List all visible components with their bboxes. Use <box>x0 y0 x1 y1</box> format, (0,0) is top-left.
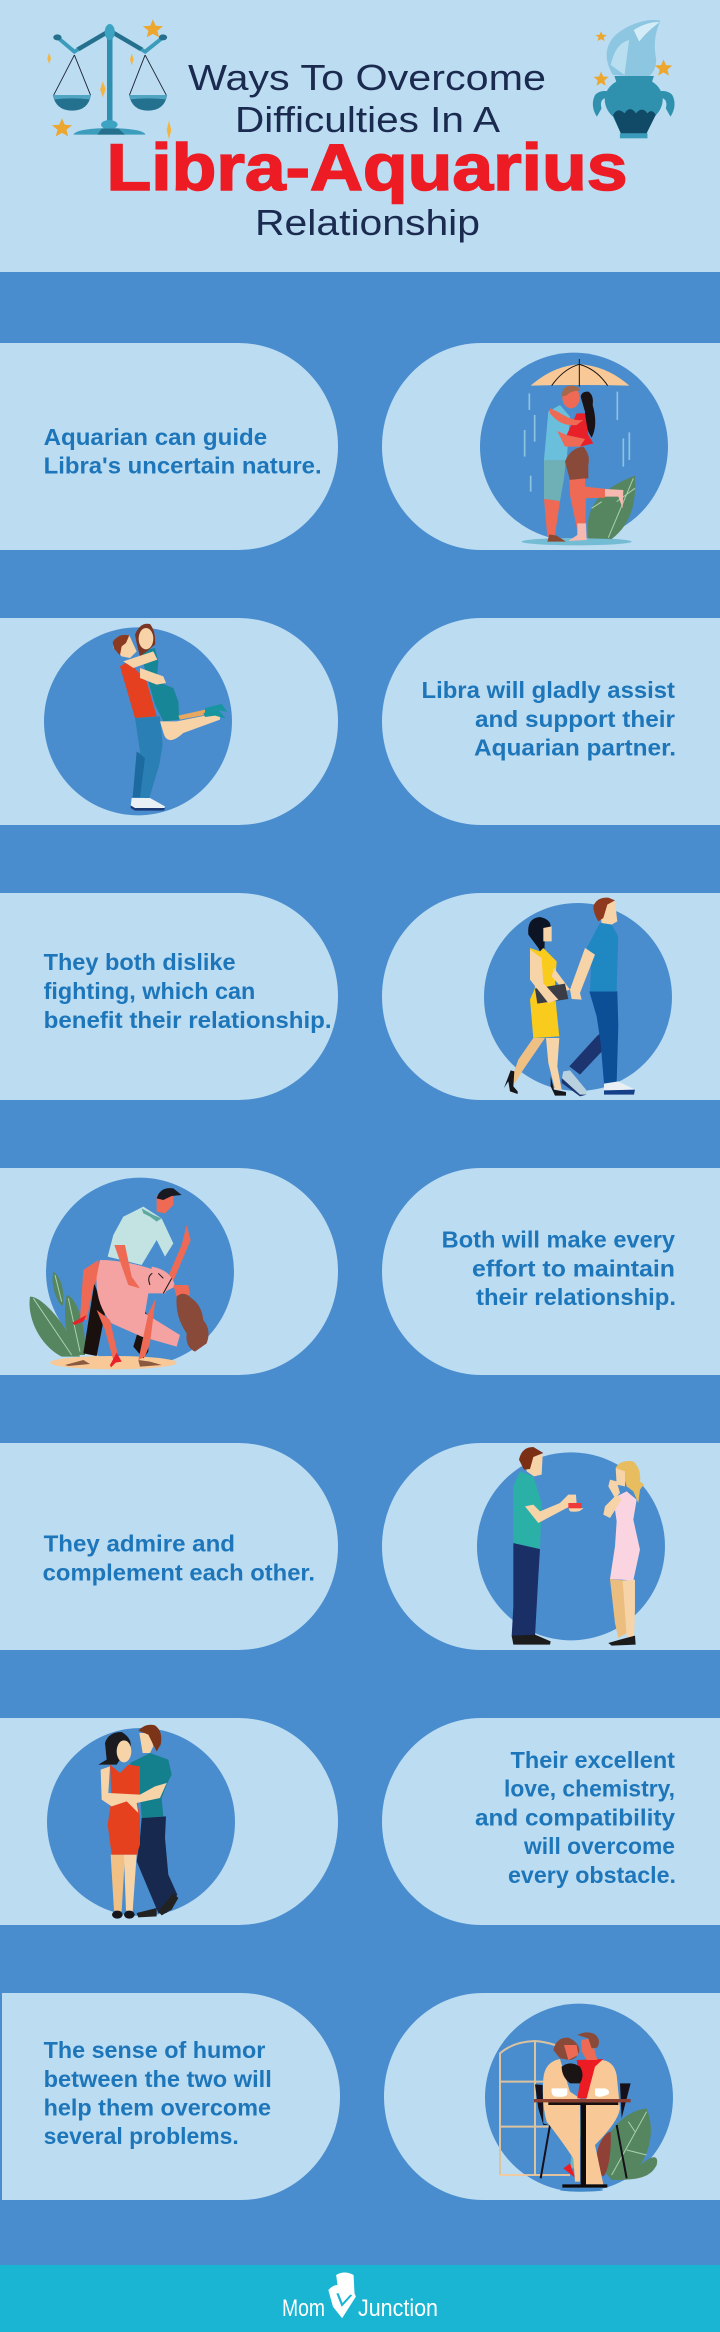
row 7 text panel: between the two will <box>44 2066 272 2092</box>
row 1 illustration panel <box>382 343 720 550</box>
row 5 text panel: complement each other. <box>43 1560 315 1586</box>
row 6 text panel: every obstacle. <box>508 1862 676 1888</box>
logo: MomJunction <box>282 2272 438 2322</box>
row 3 text panel: fighting, which can <box>44 978 255 1004</box>
row 6 text panel: will overcome <box>523 1833 675 1859</box>
row 4 text panel: effort to maintain <box>472 1256 675 1282</box>
illustration: couple kissing under umbrella <box>480 353 668 545</box>
row 1 text panel: Aquarian can guide <box>44 424 267 450</box>
logo: MomJunction: Junction <box>358 2295 438 2322</box>
title: Difficulties In A <box>235 99 500 140</box>
illustration: man lifting woman in hug <box>44 624 232 815</box>
row 7 text panel: The sense of humor <box>44 2037 265 2063</box>
row 4 text panel <box>382 1168 720 1375</box>
icon: mother and child <box>328 2272 356 2318</box>
row 2 illustration panel <box>0 618 338 825</box>
illustration: couple at cafe table <box>485 2004 673 2192</box>
row 5 text panel <box>0 1443 338 1650</box>
row 7 illustration panel <box>384 1993 720 2200</box>
logo: MomJunction: Mom <box>282 2295 325 2322</box>
row 4 text panel: their relationship. <box>476 1284 676 1310</box>
row 2 text panel: and support their <box>475 706 675 732</box>
row 3 illustration panel <box>382 893 720 1100</box>
illustration: couple embracing <box>47 1725 235 1919</box>
row 2 text panel: Libra will gladly assist <box>422 677 675 703</box>
title <box>106 57 628 243</box>
row 5 illustration panel <box>382 1443 720 1650</box>
illustration: couple walking hand in hand <box>484 898 672 1096</box>
row 3 text panel: They both dislike <box>44 949 236 975</box>
row 6 text panel: love, chemistry, <box>504 1776 675 1802</box>
row 7 text panel: several problems. <box>44 2123 239 2149</box>
title: Relationship <box>255 202 480 243</box>
title: Ways To Overcome <box>188 57 546 98</box>
icon: aquarius vase <box>593 20 675 138</box>
header panel <box>0 0 720 272</box>
row 1 text panel: Libra's uncertain nature. <box>44 452 322 478</box>
row 4 text panel: Both will make every <box>442 1227 675 1253</box>
row 6 text panel: Their excellent <box>510 1747 675 1773</box>
icon: libra scales <box>47 19 171 139</box>
illustration: proposal with ring box <box>477 1447 665 1646</box>
illustration: couple dancing <box>30 1178 234 1369</box>
row 3 text panel <box>0 893 338 1100</box>
row 4 illustration panel <box>0 1168 338 1375</box>
row 3 text panel: benefit their relationship. <box>44 1007 332 1033</box>
row 5 text panel: They admire and <box>44 1531 235 1557</box>
row 2 text panel: Aquarian partner. <box>474 734 676 760</box>
row 7 text panel: help them overcome <box>44 2095 271 2121</box>
row 6 text panel <box>382 1718 720 1925</box>
row 2 text panel <box>382 618 720 825</box>
row 7 text panel <box>2 1993 340 2200</box>
row 6 illustration panel <box>0 1718 338 1925</box>
footer band <box>0 2265 720 2332</box>
title: Libra-Aquarius <box>106 130 628 204</box>
row 1 text panel <box>0 343 338 550</box>
row 6 text panel: and compatibility <box>475 1805 675 1831</box>
